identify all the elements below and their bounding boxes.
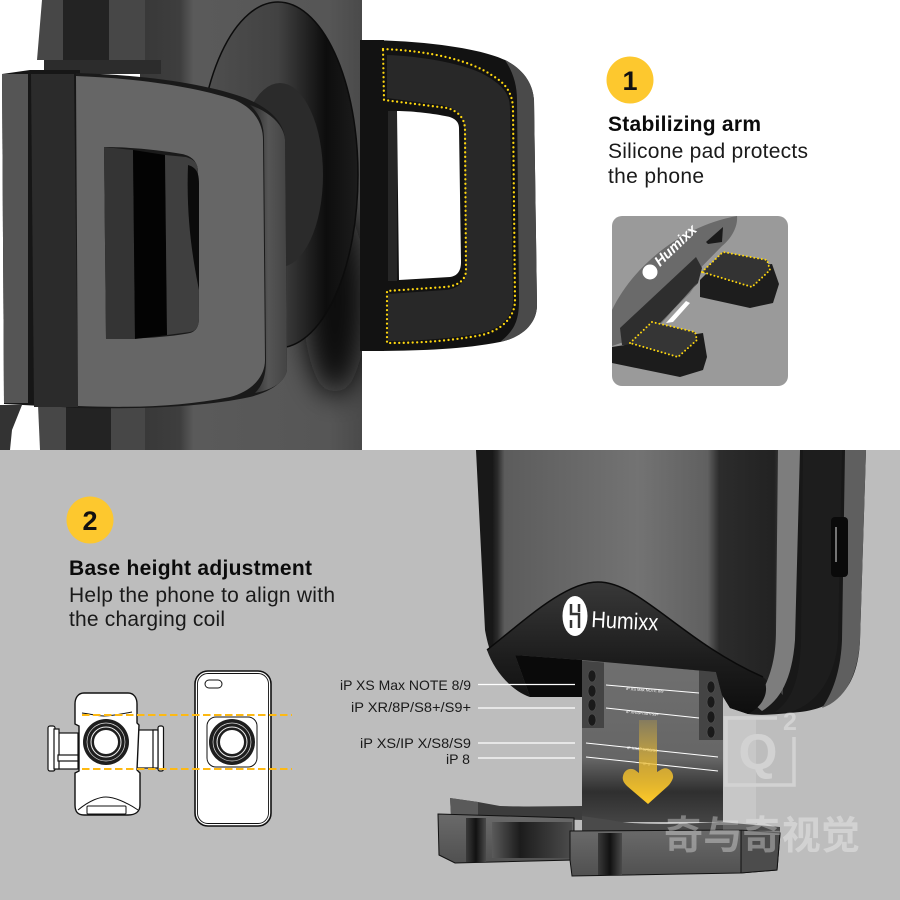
left hole 4	[588, 714, 596, 726]
logo mark	[571, 604, 579, 628]
badge number 1: 1	[622, 66, 638, 96]
phone coil ring a	[213, 723, 251, 761]
inset back foot base	[700, 264, 779, 308]
right arm inner slot shade	[388, 111, 397, 281]
watermark Q: Q	[739, 724, 777, 780]
right hole 2	[707, 696, 715, 708]
plate label 4: iP 8	[643, 761, 651, 767]
heading: base height adjustment: Base height adjustment	[69, 557, 312, 580]
slot right panel	[165, 155, 199, 335]
watermark superscript: 2	[783, 708, 797, 736]
body line 1: Help the phone to align with	[69, 584, 335, 607]
left hole 1	[588, 670, 596, 682]
side band dark	[775, 450, 842, 712]
right wing joint	[153, 730, 158, 768]
side band light	[755, 450, 800, 711]
left strip	[582, 655, 604, 728]
badge circle 2	[66, 496, 114, 544]
label: iP XS/IP X/S8/S9: iP XS/IP X/S8/S9	[360, 735, 471, 751]
right hole 1	[707, 681, 715, 693]
inset front foot base	[612, 333, 707, 377]
plate line 1	[606, 685, 699, 693]
back foot lower	[438, 814, 574, 863]
inset logo circle	[642, 264, 658, 280]
right arm	[360, 40, 537, 351]
inset photo: silicone feet	[612, 216, 788, 386]
inset front foot dots	[630, 322, 697, 357]
right hole 3	[707, 711, 715, 723]
front foot upper	[582, 816, 780, 835]
right holes	[707, 681, 715, 738]
front foot lower	[570, 830, 780, 876]
watermark tint	[723, 716, 756, 830]
hole strip right	[699, 665, 723, 740]
label: iP XS Max NOTE 8/9: iP XS Max NOTE 8/9	[340, 677, 471, 693]
plate label 3: iP XS/IP X/S8/S9	[627, 745, 659, 753]
plate line 3	[586, 743, 718, 757]
inset logo text: Humixx	[652, 221, 701, 270]
phone coil disc	[209, 719, 255, 765]
sliding plate	[582, 655, 723, 822]
label: iP XR/8P/S8+/S9+: iP XR/8P/S8+/S9+	[351, 699, 471, 715]
slot centre panel	[133, 150, 167, 339]
plate marking lines	[586, 685, 718, 771]
phone coil	[209, 719, 255, 765]
inset dark bar	[620, 257, 702, 345]
neck	[44, 60, 161, 74]
panel: top white background	[0, 0, 900, 450]
slot right shadow	[188, 165, 199, 290]
chin rim	[487, 582, 763, 677]
side band right	[822, 450, 866, 708]
side rails	[360, 40, 384, 351]
disc	[198, 2, 358, 348]
heading: stabilizing arm: Stabilizing arm	[608, 113, 761, 136]
left hole 3	[588, 699, 596, 711]
yellow down arrow	[623, 720, 673, 804]
plate line 2	[606, 708, 699, 718]
front foot end cap	[741, 830, 780, 873]
logo circle	[562, 596, 588, 636]
back foot joint	[466, 818, 486, 862]
front foot joint	[598, 833, 622, 875]
leader line 2	[478, 707, 575, 709]
inset slot surround	[655, 283, 697, 328]
badge number 2: 2	[82, 506, 98, 536]
leader line 4	[478, 757, 575, 759]
left arm front face	[76, 76, 265, 407]
holder body	[75, 693, 140, 815]
plate marking labels	[626, 686, 664, 767]
device shell	[476, 450, 866, 715]
holder bottom arch	[78, 797, 138, 810]
phone coil centre	[220, 730, 244, 754]
diagram: holder and phone coil alignment	[48, 671, 292, 826]
left wing joint	[54, 729, 59, 769]
back foot recess	[492, 822, 572, 858]
plate line 4	[586, 757, 718, 771]
badge circle 1	[606, 56, 654, 104]
lower clamp dark band	[66, 405, 111, 450]
body line 2: the phone	[608, 165, 704, 188]
shadow below disc	[303, 205, 367, 395]
right hole 4	[707, 726, 715, 738]
watermark	[664, 708, 860, 858]
phone camera	[205, 680, 222, 688]
leader line 1	[478, 684, 575, 686]
inset front foot pad	[630, 322, 697, 357]
right arm outer edge	[500, 60, 537, 342]
slot interior	[104, 147, 199, 339]
yellow dotted outline	[383, 49, 515, 343]
photo: base height adjuster	[438, 450, 866, 876]
holder coil ring b	[91, 727, 121, 757]
left arm backing	[2, 70, 80, 408]
upper alignment dashes	[82, 714, 292, 716]
holder top arch	[82, 712, 132, 716]
back foot upper	[450, 798, 582, 820]
right wing pad	[158, 726, 164, 771]
back foot upper light	[450, 798, 478, 816]
inset charging slot	[666, 301, 690, 323]
hole strip left	[582, 655, 604, 728]
usb port	[831, 517, 848, 577]
slot left panel	[104, 147, 135, 339]
phone outline	[195, 671, 271, 826]
body line 2: the charging coil	[69, 608, 225, 631]
usb port highlight	[835, 527, 837, 562]
mount body	[140, 0, 362, 450]
watermark chinese name: 奇与奇视觉	[664, 815, 860, 858]
watermark frame top	[724, 716, 777, 720]
upper clamp block	[37, 0, 145, 60]
left holes	[588, 670, 596, 726]
label: iP 8: iP 8	[446, 751, 470, 767]
holder coil	[83, 719, 129, 765]
left hole 2	[588, 685, 596, 697]
holder coil disc	[83, 719, 129, 765]
holder foot	[87, 806, 126, 814]
badge: step 1	[606, 56, 654, 104]
watermark frame	[726, 717, 794, 785]
inner ring	[237, 83, 323, 267]
inset back foot dots	[702, 252, 770, 287]
lower alignment dashes	[82, 768, 292, 770]
inset back slot	[706, 227, 723, 244]
body line 1: Silicone pad protects	[608, 140, 808, 163]
left arm edge	[250, 105, 287, 393]
left wing arm	[57, 733, 78, 769]
left wing bar	[58, 755, 78, 761]
text block: stabilizing arm	[608, 113, 808, 188]
inset background	[612, 216, 788, 386]
panel: bottom grey background	[0, 450, 900, 900]
bracket left	[0, 405, 22, 450]
inset back foot pad	[702, 252, 770, 287]
logo wordmark: Humixx	[591, 606, 659, 636]
leader line 3	[478, 742, 575, 744]
chin	[487, 582, 766, 714]
right strip	[699, 665, 723, 740]
logo	[562, 596, 659, 636]
right arm silicone pad	[387, 55, 513, 341]
text block: base height adjustment	[69, 557, 335, 631]
holder left wing	[48, 726, 78, 771]
window behind plate	[515, 655, 582, 697]
plate label 2: iP XR/8P/S8+/S9+	[626, 709, 660, 717]
left arm side	[76, 73, 287, 408]
holder coil centre	[94, 730, 118, 754]
badge: step 2	[66, 496, 114, 544]
holder right wing	[134, 726, 164, 771]
holder coil ring a	[87, 723, 125, 761]
phone coil ring b	[217, 727, 247, 757]
shadow shape	[303, 205, 367, 395]
phone wireless pad	[207, 717, 257, 767]
inset device shell	[612, 216, 737, 346]
upper clamp dark band	[63, 0, 109, 60]
left arm outer band	[2, 74, 28, 403]
photo: mount close-up with stabilizing arms	[0, 0, 537, 450]
right wing arm	[134, 730, 156, 768]
plate label 1: iP XS Max NOTE 8/9	[626, 686, 664, 694]
labels: phone model lines	[340, 677, 575, 767]
device back face	[493, 450, 783, 695]
lower clamp block	[38, 405, 145, 450]
left arm dark band	[31, 74, 78, 407]
left wing pad	[48, 726, 55, 771]
phone inner outline	[198, 674, 268, 824]
